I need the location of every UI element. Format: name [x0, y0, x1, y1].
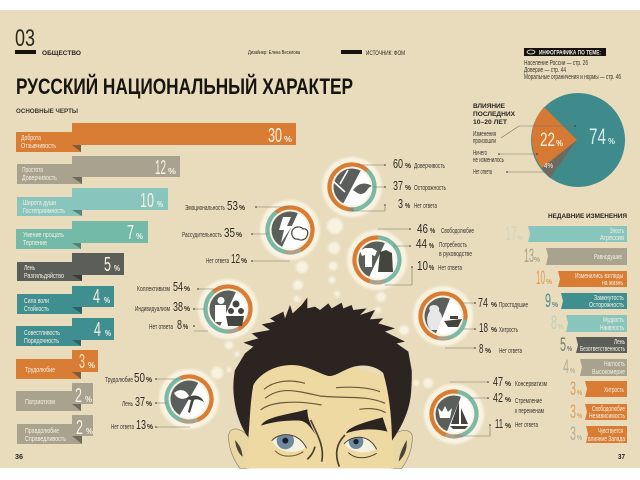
bar: conscientiousness 4% [16, 318, 114, 346]
labels: simplicity [445, 295, 528, 356]
change: changed outlook 10%: на жизнь [602, 278, 623, 287]
page number: 36: 36 [15, 454, 23, 461]
change: laziness 5%: Лень [614, 337, 625, 346]
title: РУССКИЙ НАЦИОНАЛЬНЫЙ ХАРАКТЕР [16, 74, 353, 99]
bar: conscientiousness 4%: 4 [94, 319, 101, 341]
labels: diligence: 50 [134, 370, 145, 385]
nose lines [307, 420, 345, 467]
ear: right [392, 430, 412, 468]
bar: forgiveness 7%: Терпение [23, 238, 47, 247]
bar: hospitality 10%: 10 [140, 190, 154, 212]
bar: kindness 30% [16, 123, 296, 152]
labels: conservatism: 11 [495, 416, 503, 431]
labels: collectivism: 54 [173, 279, 183, 294]
change: indifference 13% [524, 246, 627, 267]
bar: laziness 5% [17, 253, 124, 281]
labels: conservatism: % [505, 397, 512, 404]
pie heading and legend: не изменилось [473, 157, 504, 164]
change: cunning 3%: 3 [570, 379, 576, 400]
change: laziness 5%: % [567, 346, 573, 353]
change: laziness 5% [560, 335, 627, 356]
labels: collectivism: % [184, 306, 191, 313]
section header: ОБЩЕСТВО [42, 50, 81, 57]
labels: simplicity: % [485, 348, 492, 355]
labels: trust: Нет ответа [414, 203, 437, 210]
bar chart: main traits [16, 123, 296, 444]
hair [233, 297, 412, 441]
change: changed outlook 10% [536, 268, 627, 289]
bar: conscientiousness 4%: % [105, 329, 111, 338]
labels: trust: Осторожность [414, 185, 446, 192]
bar: forgiveness 7%: % [136, 232, 143, 241]
labels: trust: 37 [393, 178, 403, 193]
labels: freedom: Потребность [439, 241, 467, 249]
labels: collectivism: Нет ответа [149, 324, 173, 331]
change: arrogance 4%: Наглость [604, 359, 625, 368]
labels: conservatism: % [505, 381, 512, 388]
labels: diligence [105, 370, 190, 432]
change: cunning 3% [570, 379, 627, 400]
change: anger 17% [505, 224, 627, 245]
change: indifference 13%: Равнодушие [594, 252, 622, 261]
circle: conservatism vs change [424, 384, 484, 444]
change: western influence 3%: % [577, 435, 583, 442]
bar: willpower 4%: 4 [93, 286, 100, 308]
section header: 03 [15, 25, 35, 52]
bar: justice 2%: Справедливость [25, 434, 66, 443]
icon: pickaxe [186, 395, 204, 413]
change: changed outlook 10%: 10 [536, 268, 545, 289]
change: wisdom 8%: 8 [551, 313, 557, 334]
change: western influence 3% [570, 424, 627, 445]
labels: emotion [182, 198, 290, 266]
labels: collectivism: Индивидуализм [135, 306, 170, 313]
bar: forgiveness 7%: Умение прощать [23, 230, 64, 239]
labels: diligence: 37 [135, 394, 145, 409]
page number: 37: 37 [618, 454, 625, 461]
labels: conservatism [450, 374, 547, 436]
bar: diligence 3% [16, 350, 98, 379]
labels: emotion: Нет ответа [206, 258, 229, 265]
labels: conservatism: 42 [493, 390, 503, 405]
labels: trust: 3 [398, 196, 403, 211]
labels: emotion: 12 [231, 251, 240, 266]
labels: diligence: % [146, 377, 153, 384]
pie heading and legend: произошли [473, 138, 496, 145]
circle: trust vs caution [320, 155, 384, 219]
labels: conservatism: Стремление [515, 398, 542, 405]
labels: diligence: Нет ответа [111, 424, 134, 431]
icon: broom and hand [333, 170, 348, 192]
illustration: man's head [229, 297, 412, 468]
wrinkles [261, 381, 386, 413]
change: arrogance 4% [563, 357, 627, 378]
related infographics box [524, 48, 621, 81]
circle: freedom vs guidance [347, 230, 407, 290]
face [246, 360, 394, 468]
labels: freedom [378, 221, 474, 285]
labels: collectivism: 8 [177, 317, 182, 332]
change: cunning 3%: Хитрость [604, 385, 624, 394]
bar: justice 2%: % [86, 427, 93, 436]
bar: diligence 3%: Трудолюбие [25, 365, 55, 374]
bar: kindness 30%: Доброта [21, 133, 42, 142]
change: anger 17%: Агрессия [600, 233, 624, 242]
eyebrows [261, 409, 316, 435]
bar: hospitality 10%: Широта души [23, 198, 56, 207]
icon: t-shirt [360, 248, 377, 267]
pie heading and legend: Изменения [473, 131, 496, 138]
pie chart: influence of the last 10-20 years: % [556, 139, 563, 148]
change: independence 3% [570, 402, 627, 423]
bar: willpower 4%: Стойкость [24, 304, 49, 313]
labels: simplicity: 8 [479, 341, 484, 356]
bar: laziness 5%: Лень [24, 263, 35, 272]
labels: conservatism: % [505, 423, 512, 430]
icon: matryoshka [427, 305, 442, 330]
labels: simplicity: % [491, 302, 498, 309]
thought bubbles [211, 218, 433, 388]
labels: freedom: % [429, 243, 435, 250]
related infographics box: Население России — стр. 26 [524, 60, 588, 67]
labels: diligence: Лень [122, 401, 133, 408]
labels: freedom: 46 [417, 221, 428, 236]
bar: simplicity 12%: Доверчивость [22, 173, 57, 182]
labels: collectivism: Коллективизм [137, 286, 170, 293]
bar: laziness 5%: 5 [104, 254, 111, 276]
bar: diligence 3%: 3 [79, 351, 85, 373]
pie chart: influence of the last 10-20 years: 74 [589, 124, 606, 149]
section header: Дизайнер: Елена Веселова [248, 49, 301, 56]
labels: emotion: % [239, 205, 246, 212]
circle: collectivism vs individualism [196, 277, 260, 341]
change: changed outlook 10%: % [546, 279, 553, 286]
labels: emotion: 53 [227, 198, 238, 213]
labels: freedom: 44 [416, 236, 427, 251]
change: reserve 9%: % [552, 302, 559, 309]
bar: willpower 4%: Сила воли [24, 296, 49, 305]
change: anger 17%: Злость [610, 226, 624, 235]
labels: collectivism: 38 [173, 299, 183, 314]
section header: ИСТОЧНИК: ФОМ [366, 51, 405, 57]
pie heading and legend: 10–20 ЛЕТ [473, 119, 507, 126]
bar: justice 2% [17, 415, 93, 444]
labels: simplicity: Хитрость [499, 327, 518, 334]
icon: pillow [174, 390, 189, 399]
pie heading and legend: Нет ответа [473, 169, 492, 176]
change: western influence 3%: Чувствуется [598, 426, 623, 435]
bar: kindness 30%: 30 [268, 125, 282, 147]
bar: simplicity 12% [17, 156, 180, 184]
bar: hospitality 10% [17, 188, 168, 216]
bar: kindness 30%: % [284, 135, 292, 144]
labels: simplicity: 74 [478, 295, 488, 310]
bar: simplicity 12%: % [168, 167, 176, 176]
change: indifference 13%: 13 [524, 246, 534, 267]
labels: collectivism: % [184, 286, 191, 293]
heading: main traits: ОСНОВНЫЕ ЧЕРТЫ [16, 108, 78, 115]
labels: diligence: % [147, 424, 154, 431]
icon: lightning bolt [279, 217, 292, 243]
change: anger 17%: % [517, 235, 524, 242]
labels: freedom: 10 [417, 258, 428, 273]
change: arrogance 4%: % [570, 368, 576, 375]
labels: emotion: % [241, 258, 248, 265]
labels: emotion: Рассудительность [182, 232, 222, 239]
labels: diligence: 13 [136, 417, 146, 432]
change: wisdom 8%: % [558, 324, 564, 331]
pie chart: influence of the last 10-20 years: % [608, 137, 615, 146]
change: wisdom 8%: Наивность [600, 323, 624, 332]
icon: group of people [226, 300, 244, 326]
bar: conscientiousness 4%: Совестливость [24, 328, 60, 337]
icon: boat [444, 316, 462, 327]
ear: left [229, 429, 248, 468]
change: laziness 5%: 5 [560, 335, 566, 356]
labels: trust: % [405, 185, 412, 192]
bar: laziness 5%: % [114, 264, 120, 273]
bar: simplicity 12%: Простота [22, 165, 44, 174]
labels: conservatism: к переменам [515, 408, 544, 415]
labels: trust: % [405, 163, 412, 170]
icon: brain [292, 227, 308, 240]
bar: forgiveness 7% [16, 221, 148, 249]
bar: kindness 30%: Отзывчивость [21, 141, 56, 150]
bar: laziness 5%: Разгильдяйство [24, 271, 64, 280]
labels: conservatism: Консерватизм [515, 381, 547, 388]
related infographics box: Доверие — стр. 44 [524, 67, 566, 74]
bar: patriotism 2% [16, 383, 93, 411]
bar: forgiveness 7%: 7 [127, 222, 134, 244]
labels: emotion: Эмоциональность [185, 205, 225, 212]
related infographics box: ИНФОГРАФИКА ПО ТЕМЕ: [539, 50, 601, 56]
circle: emotion vs reason [258, 198, 322, 262]
circle: simplicity vs cunning [413, 286, 473, 346]
icon: crown [438, 406, 452, 418]
labels: freedom: % [430, 228, 436, 235]
change: arrogance 4%: 4 [563, 357, 569, 378]
change: reserve 9%: Замкнутость [594, 293, 624, 302]
circle: diligence vs laziness [159, 369, 219, 429]
pie chart: influence of the last 10-20 years [531, 93, 625, 187]
bar: patriotism 2%: Патриотизм [25, 397, 55, 406]
bar: hospitality 10%: Гостеприимность [23, 206, 65, 215]
labels: simplicity: 18 [479, 320, 488, 335]
bar: patriotism 2%: % [85, 395, 92, 404]
change: cunning 3%: % [577, 390, 583, 397]
labels: collectivism: % [183, 324, 189, 331]
bar: simplicity 12%: 12 [155, 157, 166, 179]
pie chart: influence of the last 10-20 years: 4% [544, 163, 553, 170]
labels: freedom: % [429, 265, 435, 272]
labels: emotion: 35 [224, 225, 235, 240]
labels: freedom: в руководстве [439, 251, 472, 258]
labels: collectivism [135, 279, 218, 332]
labels: trust [352, 156, 446, 211]
labels: diligence: % [146, 401, 153, 408]
bar chart: recent changes [505, 224, 627, 445]
change: wisdom 8% [551, 313, 627, 334]
bar: willpower 4% [17, 286, 114, 314]
icon: suit jacket [378, 250, 393, 272]
change: arrogance 4%: Высокомерие [592, 367, 625, 376]
bar: willpower 4%: % [104, 296, 110, 305]
bar: justice 2%: 2 [76, 417, 83, 439]
icon: sailboat [450, 402, 468, 429]
change: wisdom 8%: Мудрость [603, 315, 624, 324]
labels: emotion: % [236, 232, 243, 239]
change: indifference 13%: % [534, 257, 541, 264]
change: independence 3%: 3 [570, 402, 576, 423]
labels: freedom: Нет ответа [438, 265, 462, 272]
labels: simplicity: % [491, 327, 498, 334]
labels: trust: % [405, 203, 411, 210]
bar: justice 2%: Правдолюбие [25, 426, 59, 435]
change: independence 3%: % [577, 413, 583, 420]
bar: hospitality 10%: % [157, 200, 163, 209]
change: reserve 9%: 9 [545, 291, 551, 312]
labels: trust: 60 [393, 156, 403, 171]
labels: freedom: Свободолюбие [441, 227, 474, 235]
pie chart: influence of the last 10-20 years: 22 [540, 130, 555, 151]
labels: simplicity: Простодушие [499, 302, 528, 309]
pie heading and legend: ПОСЛЕДНИХ [473, 111, 516, 118]
change: western influence 3%: 3 [570, 424, 576, 445]
labels: simplicity: Нет ответа [499, 348, 522, 355]
bar: conscientiousness 4%: Порядочность [24, 336, 59, 345]
section header [15, 25, 405, 57]
labels: conservatism: Нет ответа [515, 422, 538, 429]
change: anger 17%: 17 [505, 224, 517, 245]
change: reserve 9%: Осторожность [589, 300, 624, 309]
labels: conservatism: 47 [493, 374, 503, 389]
change: reserve 9% [545, 291, 627, 312]
pie heading and legend: Ничего [473, 150, 487, 157]
eyes [272, 432, 377, 458]
heading: recent changes: НЕДАВНИЕ ИЗМЕНЕНИЯ [548, 213, 627, 220]
pie heading and legend [473, 103, 575, 176]
labels: diligence: Трудолюбие [105, 376, 133, 384]
pie heading and legend: ВЛИЯНИЕ [473, 103, 506, 110]
bar: patriotism 2%: 2 [75, 385, 82, 407]
labels: trust: Доверчивость [414, 163, 445, 170]
bar: diligence 3%: % [88, 361, 95, 370]
icon: single person [215, 297, 226, 322]
